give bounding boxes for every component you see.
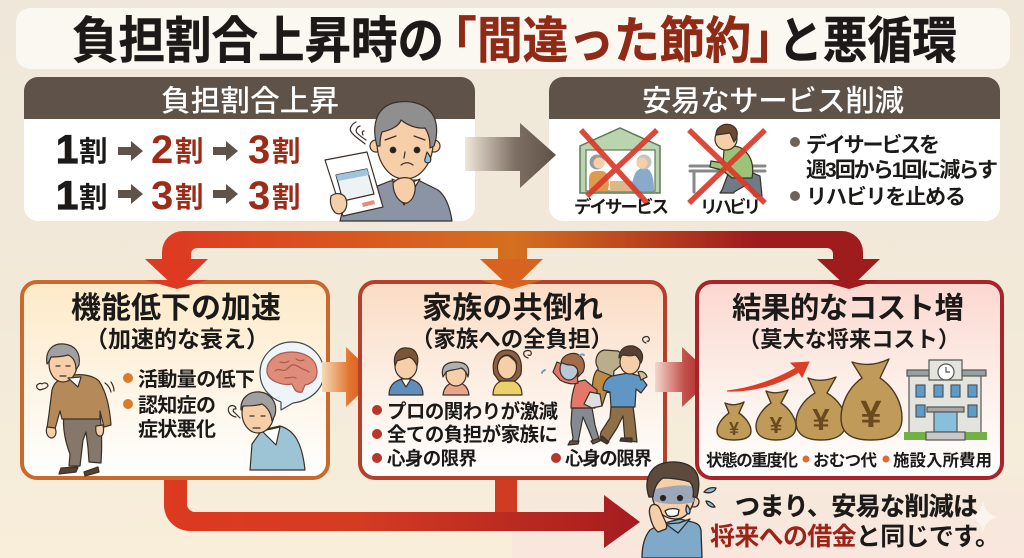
- rate row 1: 割: [272, 136, 301, 168]
- title: 「: [427, 13, 477, 69]
- bullets: [790, 133, 998, 209]
- caption row: おむつ代: [813, 451, 878, 470]
- sparkle mark: [969, 500, 997, 534]
- panel: 家族の共倒れ: [360, 280, 665, 478]
- rate row 2: 割: [272, 182, 301, 214]
- icon: stooped elderly man: [37, 344, 114, 476]
- yen signs: ¥: [729, 419, 739, 439]
- title: と悪循環: [778, 13, 957, 69]
- bullet list: [123, 368, 255, 441]
- title: 負担割合上昇時の: [72, 13, 444, 69]
- rate row 1: [56, 128, 301, 172]
- heading: 結果的なコスト増: 結果的なコスト増: [732, 292, 964, 325]
- arrow: to cost: [655, 347, 714, 407]
- heading: 負担割合上昇: 負担割合上昇: [161, 85, 339, 118]
- icon: rehabilitation crossed: [690, 124, 765, 196]
- bullet list: プロの関わりが激減: [387, 400, 558, 423]
- subheading: （加速的な衰え）: [85, 326, 269, 352]
- yen signs: ¥: [812, 402, 830, 437]
- rate row 1: 1: [56, 128, 78, 172]
- caption row: 施設入所費用: [893, 451, 992, 470]
- rate row 1: 割: [175, 136, 204, 168]
- bullet list: 活動量の低下: [138, 368, 255, 391]
- icon: day service building crossed: [580, 128, 660, 193]
- panel: 結果的なコスト増: [697, 280, 1002, 478]
- bullet list: [372, 400, 652, 469]
- title: [16, 8, 1010, 69]
- yen signs: ¥: [770, 412, 783, 438]
- rate row 2: 割: [79, 182, 108, 214]
- icon: exhausted couple with luggage: [542, 336, 649, 445]
- label: デイサービス: デイサービス: [574, 197, 669, 217]
- rate row 1: 2: [151, 128, 173, 172]
- arrow: cut services: [465, 123, 556, 188]
- icon: distressed man: [642, 462, 716, 558]
- bullets: リハビリを止める: [806, 186, 966, 209]
- bullet list: 認知症の: [138, 394, 216, 417]
- rate row 2: 3: [248, 174, 270, 218]
- icon: care facility: [904, 360, 987, 440]
- rising arrow: [727, 362, 809, 391]
- arrow: to family: [322, 347, 377, 407]
- rate row 1: 3: [248, 128, 270, 172]
- icon: worried man with bill: [325, 102, 452, 221]
- bullet list: 心身の限界: [565, 448, 652, 469]
- title: 」: [749, 13, 799, 69]
- icon: family of three: [389, 348, 531, 395]
- title: 間違った節約: [477, 13, 751, 69]
- heading: 機能低下の加速: 機能低下の加速: [71, 292, 281, 325]
- heading: 家族の共倒れ: 家族の共倒れ: [422, 292, 603, 325]
- bullets: 週3回から1回に減らす: [806, 158, 998, 182]
- icon: brain bubble: [260, 342, 324, 410]
- bullet list: 心身の限界: [387, 448, 477, 469]
- yen signs: [729, 394, 882, 439]
- panel: 安易なサービス削減: [549, 77, 1000, 221]
- panel: 機能低下の加速: [22, 280, 328, 478]
- heading: 安易なサービス削減: 安易なサービス削減: [642, 85, 904, 118]
- caption row: 状態の重度化: [706, 451, 798, 470]
- yen signs: ¥: [860, 394, 882, 436]
- subheading: （家族への全負担）: [411, 327, 613, 352]
- icon: dizzy elderly man: [228, 392, 305, 470]
- panel: 負担割合上昇: [24, 77, 475, 221]
- rate row 2: 1: [56, 174, 78, 218]
- icon: money bags: [717, 359, 902, 440]
- arrow: three-way branch: [145, 231, 880, 289]
- caption row: [706, 451, 992, 470]
- rate row 2: 割: [175, 182, 204, 214]
- conclusion text: 将来への借金と同じです。: [710, 523, 1000, 551]
- subheading: （莫大な将来コスト）: [738, 327, 960, 352]
- bullets: デイサービスを: [806, 133, 940, 157]
- bullet list: 症状悪化: [138, 418, 216, 441]
- arrow: downward bypass: [164, 478, 640, 548]
- conclusion text: [710, 493, 1000, 551]
- rate row 2: [56, 174, 301, 218]
- label: リハビリ: リハビリ: [700, 197, 761, 217]
- red cross 2: [689, 130, 765, 203]
- red cross 1: [581, 130, 657, 203]
- rate row 1: 割: [79, 136, 108, 168]
- conclusion text: つまり、安易な削減は: [735, 493, 978, 521]
- bullet list: 全ての負担が家族に: [387, 423, 558, 446]
- rate row 2: 3: [151, 174, 173, 218]
